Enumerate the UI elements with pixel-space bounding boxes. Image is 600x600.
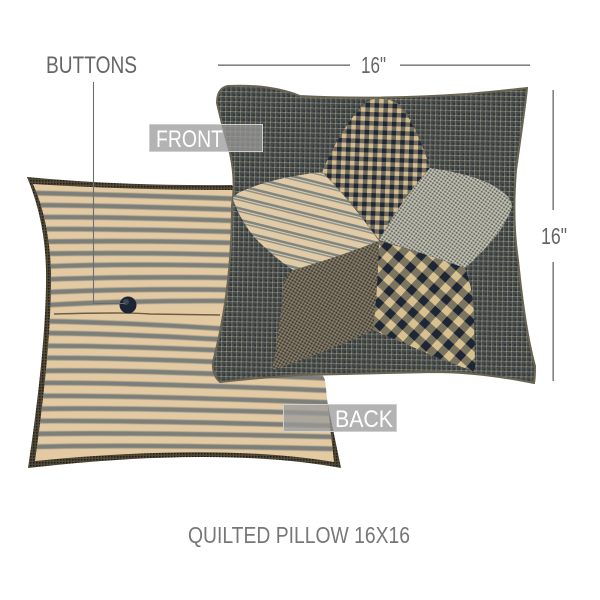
product infographic (27, 56, 566, 548)
back pillow flap fold (54, 313, 220, 315)
front label text: FRONT (156, 126, 223, 153)
width line left (218, 64, 350, 66)
back label (284, 404, 396, 433)
buttons label: BUTTONS (46, 52, 137, 79)
front label (150, 124, 262, 153)
star patch: top gingham (322, 99, 430, 240)
front pillow body (213, 86, 535, 383)
star patch: lower right check (373, 241, 475, 372)
buttons callout line (94, 82, 125, 304)
back pillow outline binding (27, 177, 341, 468)
front label box (150, 124, 262, 152)
width text: 16" (361, 52, 386, 78)
height text: 16" (541, 223, 567, 249)
back pillow ticking stripes (33, 184, 334, 462)
width line right (400, 64, 530, 66)
button (120, 296, 136, 314)
caption: QUILTED PILLOW 16X16 (188, 522, 410, 548)
back pillow (20, 175, 350, 475)
star patch: lower left brown (272, 241, 379, 370)
height line top (552, 90, 554, 210)
back label text: BACK (335, 406, 393, 433)
back label box (284, 404, 396, 432)
star patch: right grey (379, 168, 512, 268)
front pillow (213, 86, 535, 383)
star patch: left ticking (233, 172, 379, 270)
height line bottom (552, 262, 554, 381)
